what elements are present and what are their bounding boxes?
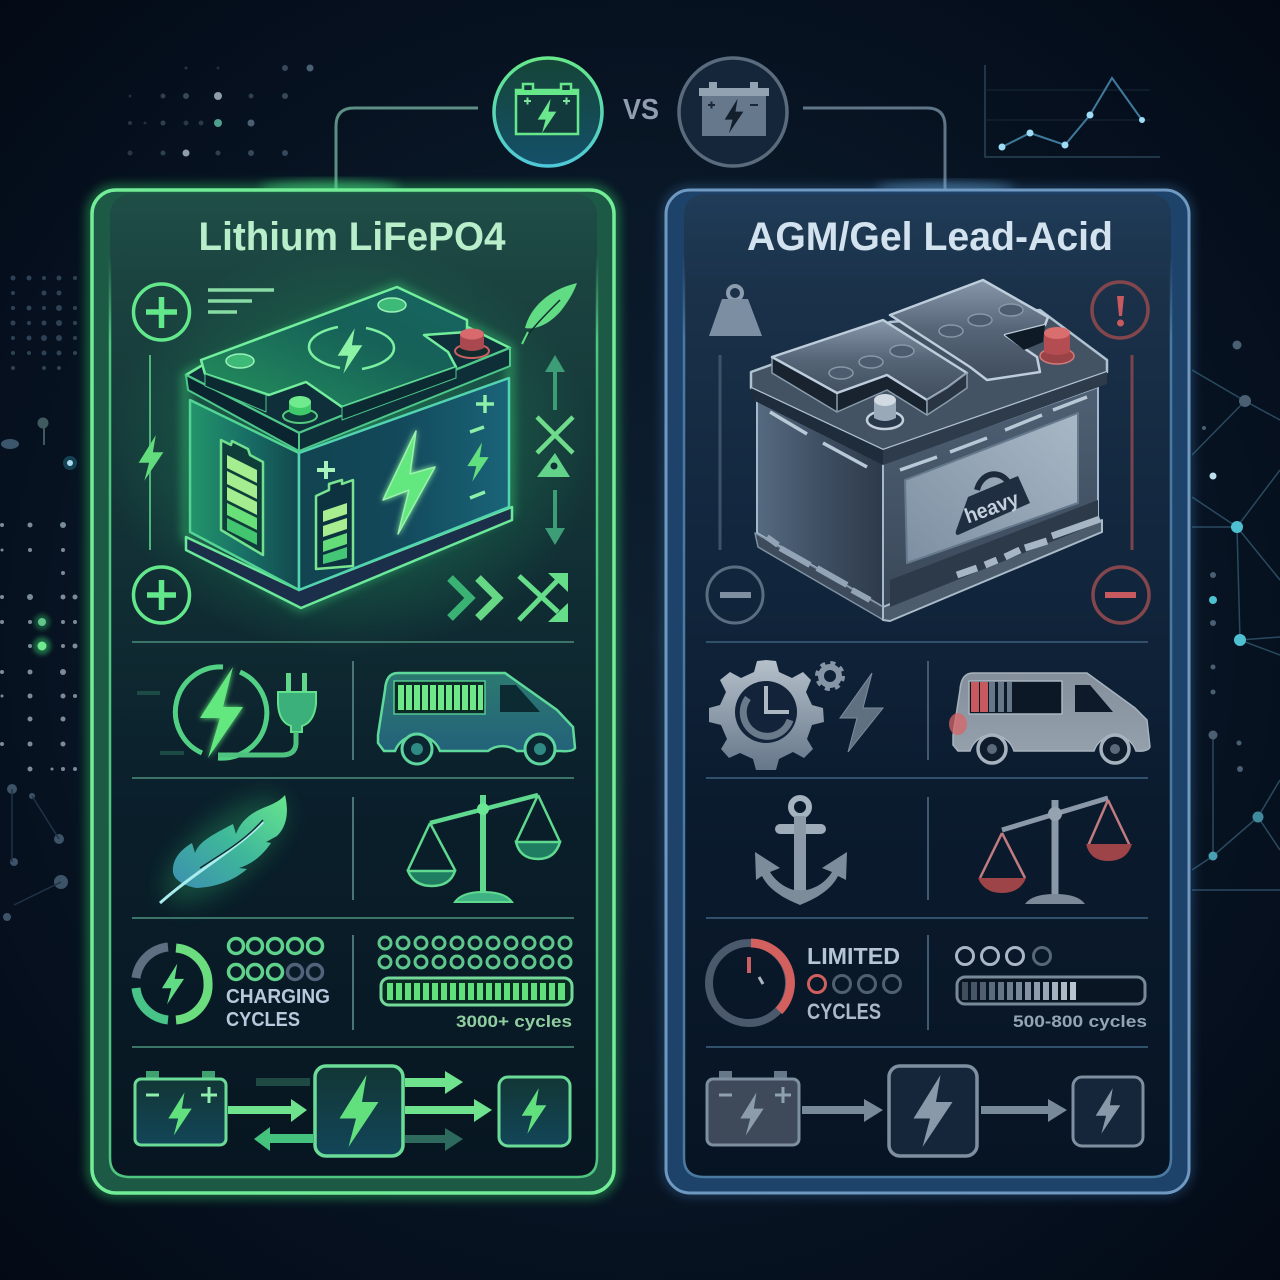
icon: plus circle bottom (134, 567, 190, 623)
icon: minus circle red (1093, 567, 1149, 623)
icon: warning circle (1092, 282, 1148, 338)
background network right (1192, 340, 1280, 890)
panel glow and frame (666, 182, 1189, 1193)
title: AGM/Gel Lead-Acid (747, 215, 1113, 259)
flow inverter (315, 1066, 403, 1156)
icon: slow charge gear (709, 660, 883, 770)
3000+ cycles label: 3000+ cycles (456, 1012, 572, 1031)
plinth (755, 500, 1102, 621)
icon: fast charge with plug (137, 667, 316, 758)
flow: battery to inverter to load (707, 1066, 1143, 1156)
background chart top right (985, 65, 1160, 157)
icon: minus circle grey (707, 567, 763, 623)
panel: AGM/Gel lead-acid (666, 182, 1189, 1193)
500-800 cycles label: 500-800 cycles (1013, 1012, 1147, 1031)
short rings (956, 948, 1050, 964)
icon: balance scale red (978, 798, 1132, 904)
icon: limited cycles donut (709, 943, 790, 1023)
icon: light feather (148, 779, 302, 921)
charging cycles label: CHARGING (226, 986, 330, 1008)
connector green (336, 108, 478, 190)
connector blue (803, 108, 945, 190)
side battery gauge large (221, 440, 263, 555)
flow arrows (802, 1099, 1067, 1122)
background dots and network left (0, 276, 78, 921)
icon: down arrow (545, 490, 565, 545)
title: Lithium LiFePO4 (198, 215, 506, 259)
cycle progress bar partial (957, 977, 1145, 1004)
cycles label: CYCLES (807, 999, 881, 1024)
icon: chevrons (450, 578, 498, 618)
icon: plus circle top (134, 284, 190, 340)
silver terminal (867, 394, 903, 429)
rings grid (379, 937, 571, 968)
icon: red vertical line (1130, 355, 1134, 550)
left lid (772, 320, 967, 415)
heavy weight label: heavy (962, 487, 1022, 528)
decorative text lines (208, 290, 274, 312)
front mini symbols (470, 395, 494, 498)
red terminal (1040, 327, 1074, 364)
lid bolt emblem (309, 327, 394, 374)
icon: leaf top right (522, 283, 577, 344)
icon: weight (709, 286, 762, 336)
icon: up arrow (545, 355, 565, 410)
vs label: VS (623, 94, 659, 126)
icon: cross and weight (537, 417, 573, 477)
negative terminal (283, 396, 317, 423)
charging cycles label: CYCLES (226, 1009, 300, 1031)
panel glow and frame (92, 181, 614, 1193)
icon: electric van (378, 673, 575, 764)
vent caps (829, 304, 1023, 379)
icon: vertical gauge with bolt (139, 355, 163, 550)
flow battery (135, 1071, 226, 1145)
icon: grey battery badge (679, 58, 787, 166)
icon: grey van (949, 673, 1150, 763)
flow: battery to inverter to load (135, 1066, 570, 1156)
dividers (706, 642, 1148, 1047)
dividers (132, 642, 574, 1047)
icon: lithium battery (186, 287, 512, 608)
icon: balance scale tilted (408, 795, 560, 902)
right lid (890, 280, 1048, 380)
icon: grey vertical line (718, 355, 722, 550)
flow output (499, 1077, 570, 1146)
icon: lead-acid battery (751, 280, 1107, 621)
heavy weight label (956, 474, 1030, 535)
flow inverter (889, 1066, 977, 1156)
panel: lithium LiFePO4 (92, 181, 614, 1193)
icon: green battery badge (494, 58, 602, 166)
charging cycles label (226, 986, 330, 1031)
limited label: LIMITED (807, 943, 900, 969)
flow arrows (228, 1071, 492, 1151)
background dot grid top left (128, 64, 314, 156)
cycle progress bar full (381, 978, 572, 1005)
cycle rings (228, 938, 322, 980)
battery glow backdrop (105, 245, 595, 655)
icon: anchor (755, 798, 847, 905)
lid screws (226, 298, 406, 368)
flow battery (707, 1071, 799, 1145)
positive terminal (455, 328, 489, 358)
front large bolt (383, 431, 435, 534)
limited rings (808, 976, 900, 992)
front battery gauge small (316, 480, 353, 569)
icon: charging cycles donut (136, 947, 208, 1020)
icon: crossed arrows (519, 573, 568, 622)
flow output (1073, 1077, 1143, 1146)
